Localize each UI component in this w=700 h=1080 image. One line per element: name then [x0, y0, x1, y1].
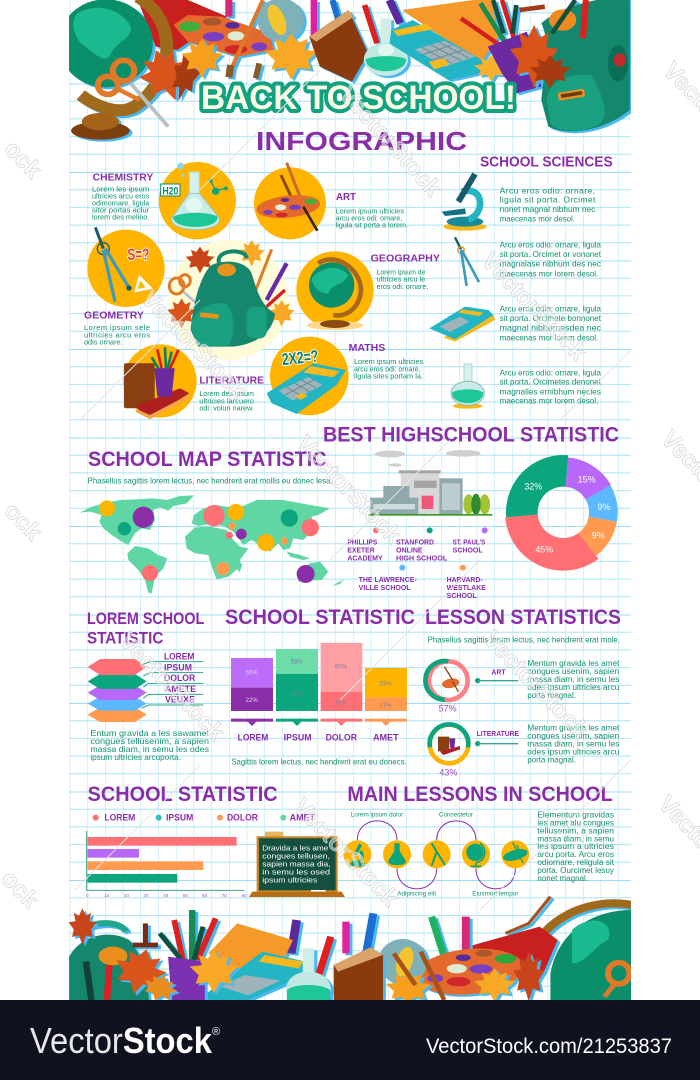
subject: geography: ultricies arcu le — [377, 275, 425, 284]
school names legend: SCHOOL — [453, 547, 483, 554]
panel: school map statistic — [80, 448, 344, 593]
art text: porta magnal. — [527, 690, 576, 700]
horizontal bar chart: 10 — [104, 893, 110, 898]
subject: chemistry: sitor portas aclur — [92, 206, 150, 215]
subject: geography — [296, 251, 440, 330]
heading: main lessons in school: MAIN LESSONS IN SCHOOL — [347, 783, 613, 806]
subject: art: arcu eros odi: ornare, — [336, 214, 402, 223]
art text: odes ipsum ultricies arcu — [527, 682, 620, 692]
science text 4 — [500, 367, 602, 406]
school names legend: ST. PAUL'S — [453, 539, 486, 546]
main lessons text: odiornare, religula sit — [537, 857, 615, 867]
stacked bar chart: 22% — [246, 698, 258, 704]
school names legend: THE LAWRENCE- — [359, 577, 417, 584]
stacked bar chart: 60% — [335, 665, 348, 671]
literature ring gauge: LITERATURE — [477, 731, 519, 738]
heading: school map statistic: SCHOOL MAP STATISTIC — [88, 448, 327, 471]
subject: geometry: Lorem ipsum sele — [84, 323, 150, 332]
lorem statistic text: massa diam, in semu les odes — [90, 744, 209, 754]
main lessons text: nonet magnal. — [537, 873, 588, 883]
science text 4: magnalles ernibhum necles — [500, 386, 601, 396]
science text 2 — [500, 240, 602, 278]
school names legend: VILLE SCHOOL — [359, 585, 411, 592]
science text 2: Arcu eros odio: ornare, ligula — [500, 240, 601, 250]
stacked bar chart: 19% — [335, 701, 348, 707]
stacked bar chart: LOREM — [238, 732, 268, 742]
science text 1: ligula sit porta. Orcimet — [500, 194, 596, 204]
science text 3: magnal nibhumesdea nec — [500, 323, 602, 333]
art text: massa diam, in semu les — [527, 674, 619, 684]
watermarks: VectorStock — [288, 793, 404, 912]
main lessons text: porta. Ourcimet lesuy — [537, 865, 615, 875]
school names legend: STANFORD — [396, 539, 434, 546]
subject: geometry: ultricies arcu eros — [84, 330, 150, 339]
subject: maths — [267, 337, 424, 415]
subject: chemistry: odimomare, ligula — [92, 198, 150, 207]
subject: maths: Lorem ipsum ultricies — [354, 357, 424, 366]
science text 1 — [500, 185, 596, 224]
lesson timeline: Adipiscing elit — [397, 891, 436, 898]
watermarks — [0, 57, 700, 914]
layered hexagons chart: VEUXE — [165, 695, 195, 705]
school names legend: ONLINE — [396, 547, 423, 554]
center backpack — [167, 240, 294, 360]
school names legend: HARVARD- — [447, 577, 483, 584]
panel: subject circles — [84, 162, 440, 419]
icon: microscope — [442, 174, 487, 231]
heading: lorem school statistic: LOREM SCHOOL — [87, 609, 204, 628]
watermarks: VectorStock — [334, 81, 447, 203]
chart legend: DOLOR — [227, 813, 258, 823]
subject: literature: odi: volun narew. — [199, 404, 254, 413]
subject: maths: MATHS — [349, 343, 385, 354]
map bubbles — [99, 500, 319, 583]
watermarks: VectorStock — [476, 247, 592, 366]
lesson timeline: Consectetur — [439, 812, 473, 819]
subject: maths: arcu eros odi: ornare, — [354, 364, 421, 373]
lesson timeline: Eiusmod tempor — [472, 891, 518, 898]
science text 1: Arcu eros odio: ornare, — [500, 185, 595, 195]
panel: school sciences — [429, 155, 613, 409]
main lessons text: Elementum gravidas — [537, 809, 614, 819]
heading: lorem school statistic — [87, 609, 204, 647]
chart legend: LOREM — [104, 813, 135, 823]
literature ring gauge — [430, 724, 519, 778]
footer bar — [0, 1000, 700, 1080]
subject: geometry: S=? — [127, 245, 149, 264]
subject: chemistry: ultricies arcu eros — [92, 191, 150, 200]
heading: lorem school statistic: STATISTIC — [87, 628, 163, 647]
science text 3 — [500, 304, 602, 342]
bar chart caption: Sagittis lorem lectus, nec hendrerit erat eu donecs. — [231, 756, 407, 766]
main lessons text: les amet alu congues — [537, 817, 614, 827]
layered hexagons chart: AMETE — [165, 684, 196, 694]
map caption: Phasellus sagittis lorem lectus, nec hendrerit erat mollis eu donec lesa. — [88, 475, 333, 485]
chart legend: IPSUM — [166, 813, 193, 823]
science text 4: Arcu eros odio: ornare, ligula — [500, 367, 601, 377]
subject: geography: GEOGRAPHY — [371, 254, 440, 265]
stacked bar chart: 17% — [380, 703, 392, 709]
literature text: odes ipsum ultricies arcu — [527, 747, 620, 757]
stacked bar chart: 47% — [291, 692, 303, 698]
lorem statistic text: Entum gravida a les sawamet — [90, 728, 210, 738]
heading: school statistic: SCHOOL STATISTIC — [88, 783, 278, 806]
main lessons text: les ipsum a ultricies — [537, 841, 614, 851]
subject: art — [254, 163, 408, 239]
lorem statistic text: congues tellusenim, a sapien — [90, 736, 209, 746]
subject: chemistry — [92, 162, 236, 239]
school names legend: SCHOOL — [447, 593, 477, 600]
layered hexagons chart: DOLOR — [164, 673, 196, 683]
subject: geometry — [84, 227, 165, 347]
subject: art: ligula sit porta a lorem. — [336, 221, 408, 230]
art ring gauge: ART — [491, 670, 506, 677]
subject: geography: Lorem ipsum de — [377, 267, 425, 276]
literature text: porta magnal. — [527, 755, 576, 765]
donut chart: 15% — [578, 474, 596, 484]
subject: literature: Lorem des ipsum — [199, 389, 254, 398]
panel: main lessons — [343, 783, 615, 898]
art ring gauge: 57% — [439, 704, 457, 714]
literature text — [527, 723, 620, 765]
subject: literature: ultricies larcuero — [199, 396, 254, 405]
school names legend: HIGH SCHOOL — [396, 555, 448, 562]
blackboard: Dravida a les ame — [262, 844, 328, 853]
art text: congues usenim, sapien — [527, 666, 620, 676]
main lessons text: arcu porta. Arcu eros — [537, 849, 614, 859]
watermarks: VectorStock — [291, 430, 407, 549]
watermarks: VectorStock — [478, 625, 594, 744]
subject: geometry: odis ornare. — [84, 338, 123, 347]
watermarks: VectorStock — [114, 627, 230, 746]
main title banner: BACK TO SCHOOL! — [201, 79, 516, 117]
footer bar: VectorStock.com/21253837 — [426, 1035, 672, 1058]
stacked bar chart: 55% — [246, 671, 258, 677]
blackboard: ipsum ultricies — [262, 876, 317, 885]
science text 1: nonet magnal nibhum nec — [500, 204, 596, 214]
heading: school sciences: SCHOOL SCIENCES — [480, 155, 613, 171]
heading: best highschool statistic: BEST HIGHSCHOOL STATISTIC — [323, 424, 619, 447]
subject: chemistry: lorem des melino. — [92, 213, 149, 222]
school names legend — [347, 527, 488, 600]
art ring gauge — [425, 661, 518, 714]
subject: maths: 2X2=? — [281, 346, 319, 369]
stacked bar chart — [231, 643, 407, 742]
lorem statistic text — [90, 728, 210, 762]
stacked bar chart: AMET — [373, 732, 399, 742]
horizontal bar chart: 40 — [163, 893, 169, 898]
footer bar: VectorStock — [30, 1020, 213, 1061]
panel: school statistic bars — [86, 783, 345, 898]
horizontal bar chart — [86, 831, 247, 898]
science text 4: maecenas mor lorem desol. — [500, 396, 598, 406]
science text 3: Arcu eros odio: ornare, ligula — [500, 304, 601, 314]
subject: geometry: GEOMETRY — [84, 310, 144, 321]
icon: compass — [455, 237, 479, 286]
subject: literature — [123, 344, 264, 419]
science text 2: sit porta. Orcimet or vononet — [500, 249, 602, 259]
donut chart: 9% — [597, 502, 610, 512]
layered hexagons chart — [88, 651, 203, 722]
blackboard: sapien massa dia, — [262, 860, 331, 869]
blackboard — [249, 832, 345, 897]
panel: best highschool statistic — [323, 424, 619, 600]
horizontal bar chart: 70 — [222, 893, 227, 898]
school names legend: ACADEMY — [347, 555, 383, 562]
main lessons text: tellusenim, a sapien — [537, 825, 614, 835]
panel: lesson statistics — [425, 606, 621, 778]
heading: lesson statistics: LESSON STATISTICS — [425, 606, 621, 629]
subject: chemistry: H20 — [162, 185, 178, 197]
horizontal bar chart: 50 — [183, 893, 188, 898]
bottom school supplies illustration — [69, 897, 632, 1007]
subject: maths: ligula sites portam la. — [354, 372, 423, 381]
top school supplies illustration — [59, 0, 630, 140]
watermarks: VectorStock — [136, 285, 252, 404]
subject: art: ART — [336, 192, 357, 203]
panel: lorem school statistic — [87, 606, 415, 766]
stacked bar chart: 53% — [380, 681, 392, 687]
literature ring gauge: 43% — [439, 768, 457, 778]
icon: flask — [451, 364, 484, 409]
subject: art: Lorem ipsum ultricies — [336, 206, 404, 215]
science text 3: sit porta. Orcimete bonnonet — [500, 313, 602, 323]
donut chart: 9% — [592, 531, 605, 541]
chart legend: AMET — [290, 813, 315, 823]
blackboard: congues tellusen, — [262, 852, 330, 861]
art text — [527, 658, 620, 700]
horizontal bar chart: 30 — [143, 893, 149, 898]
stacked bar chart: 58% — [291, 660, 303, 666]
school names legend: EXETER — [347, 547, 375, 554]
icon: calculator — [429, 307, 495, 342]
literature text: massa diam, in semu les — [527, 739, 619, 749]
layered hexagons chart: IPSUM — [164, 662, 192, 672]
grid paper panel — [69, 0, 631, 1000]
subject: literature: LITERATURE — [199, 375, 264, 386]
literature text: Mentum gravida les amet — [527, 723, 620, 733]
subject: chemistry: Lorem les ipsum — [92, 184, 149, 193]
horizontal bar chart: 20 — [124, 893, 129, 898]
science text 4: sit porta. Orcimetes denonet — [500, 377, 602, 387]
layered hexagons chart: LOREM — [164, 651, 195, 661]
footer bar: ® — [212, 1026, 220, 1038]
watermarks: ock — [0, 497, 47, 546]
horizontal bar chart: 80 — [241, 893, 247, 898]
horizontal bar chart: 60 — [202, 893, 208, 898]
literature text: congues usenim, sapien — [527, 731, 620, 741]
blackboard: in semu les osed — [262, 868, 330, 877]
lorem statistic text: ipsum ultricies arcuporta. — [90, 752, 181, 762]
heading: infographic: INFOGRAPHIC — [256, 126, 467, 156]
art text: Mentum gravida les amet — [527, 658, 620, 668]
heading: school statistic: SCHOOL STATISTIC — [225, 606, 415, 629]
lesson caption: Phasellus sagittis lorem lectus, nec hendrerit erat mole. — [428, 635, 620, 645]
school names legend: PHILLIPS — [347, 539, 378, 546]
school names legend: WESTLAKE — [447, 585, 486, 592]
lesson timeline: Lorem ipsum dolor — [351, 812, 403, 819]
science text 3: maecenas mor lorem desol. — [500, 332, 598, 342]
science text 1: maecenas mor desol. — [500, 214, 575, 224]
chart legend — [93, 813, 315, 823]
science text 2: maecenas mor lorem desol. — [500, 268, 598, 278]
science text 2: magnalase nibhum des nec — [500, 259, 602, 269]
stacked bar chart: DOLOR — [326, 732, 357, 742]
stacked bar chart: IPSUM — [284, 732, 312, 742]
main lessons text: massa diam, in semu — [537, 833, 614, 843]
lesson timeline — [343, 812, 529, 898]
subject: chemistry: CHEMISTRY — [93, 173, 153, 184]
subject: geography: eros odi: ornare, — [377, 282, 428, 291]
school building — [368, 450, 492, 516]
world map — [80, 495, 344, 593]
main lessons text — [537, 809, 615, 883]
donut chart: 32% — [524, 481, 542, 491]
donut chart — [505, 455, 618, 571]
horizontal bar chart: 0 — [86, 893, 89, 898]
watermarks: ock — [0, 135, 47, 184]
donut chart: 45% — [535, 544, 553, 554]
